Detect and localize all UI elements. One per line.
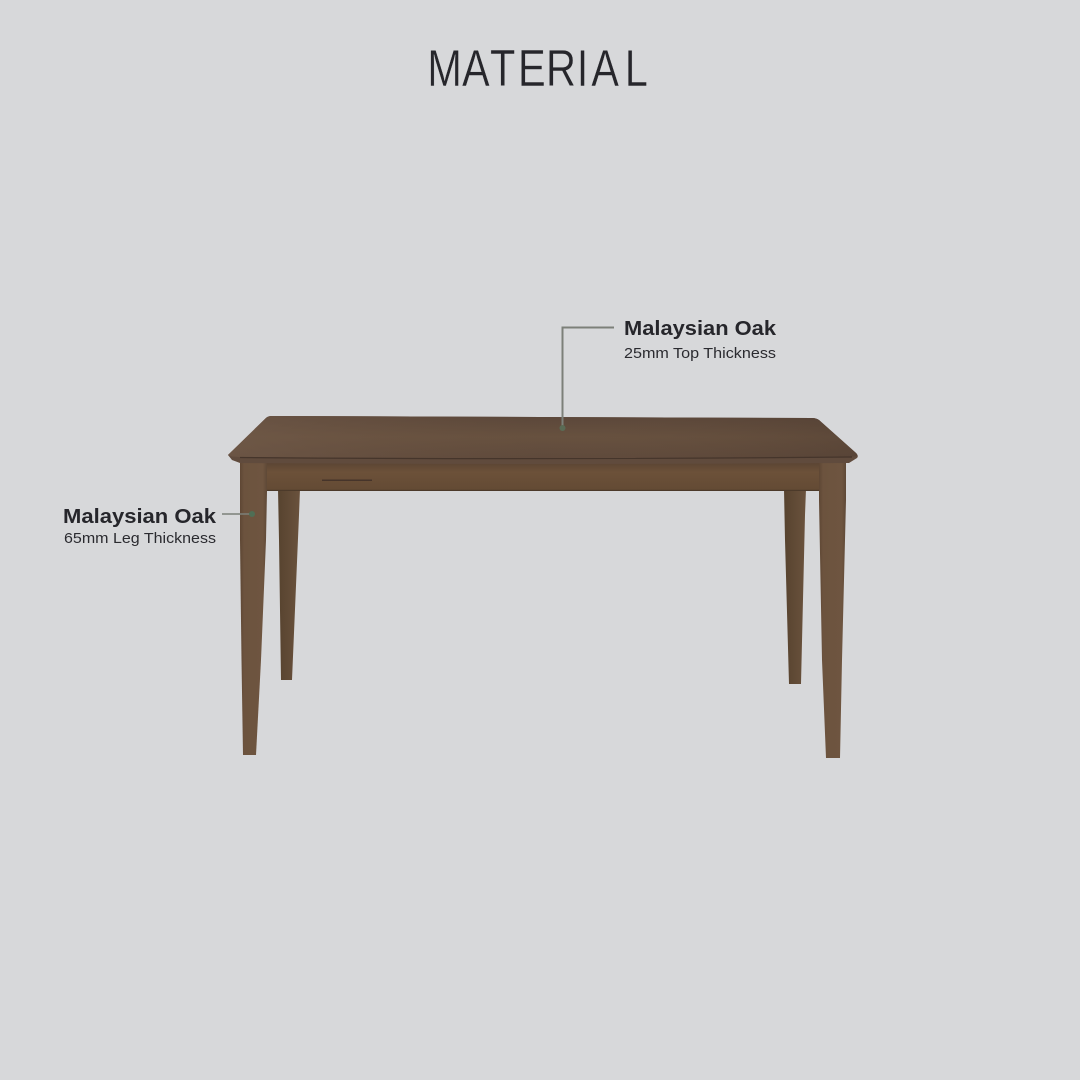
- leader line: leg: [222, 513, 252, 515]
- table illustration: [228, 416, 858, 758]
- front left leg: [240, 462, 267, 755]
- text: top thickness: 25mm Top Thickness: [624, 345, 776, 362]
- title: MATERIAL: [427, 39, 648, 97]
- apron: [266, 462, 820, 491]
- marker dot: top: [560, 425, 566, 431]
- callout: leg: [63, 505, 255, 547]
- heading: leg material: Malaysian Oak: [63, 505, 217, 528]
- leader line: top: [562, 328, 614, 428]
- table top: [228, 416, 858, 464]
- text: leg thickness: 65mm Leg Thickness: [64, 530, 216, 547]
- marker dot: leg: [249, 511, 255, 517]
- back left leg: [278, 489, 300, 680]
- back right leg: [784, 489, 806, 684]
- heading: top material: Malaysian Oak: [624, 317, 777, 340]
- callout: table top: [560, 317, 777, 431]
- front right leg: [819, 462, 846, 758]
